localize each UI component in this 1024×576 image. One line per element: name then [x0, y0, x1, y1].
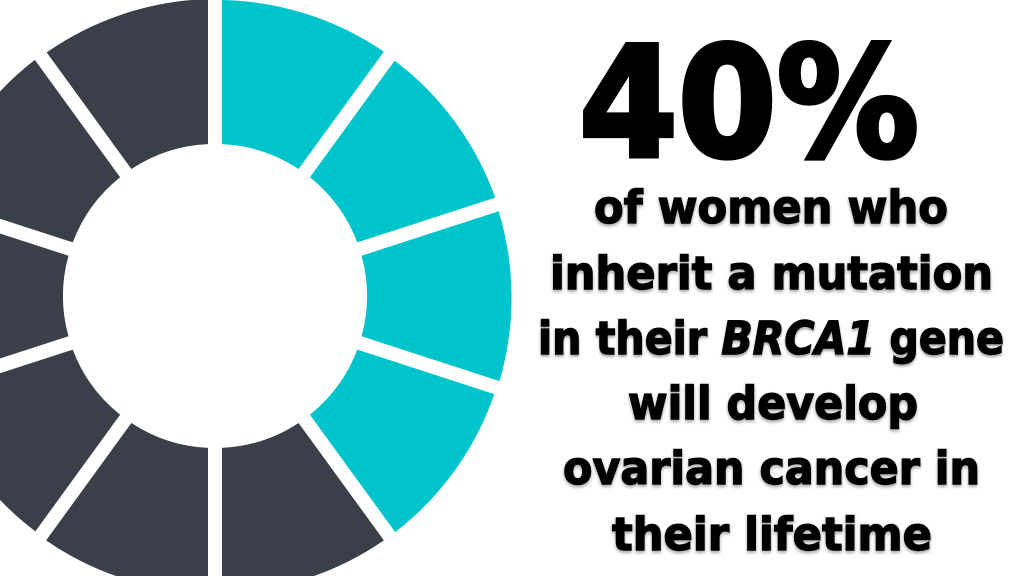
segment 4 teal — [284, 342, 494, 548]
segment 7 dark — [0, 299, 135, 531]
segment 8 dark — [0, 175, 92, 381]
segment 6 dark — [46, 423, 208, 576]
headline: 40%: 40% — [579, 15, 919, 193]
segment 5 dark — [222, 423, 384, 576]
segment 3 teal — [338, 211, 549, 417]
line 1: of women who — [594, 181, 948, 234]
line 2: inherit a mutation — [550, 247, 993, 300]
line 3: in their BRCA1 gene — [538, 312, 1004, 365]
donut chart: 4 of 10 segments highlighted — [0, 0, 549, 576]
line 5: ovarian cancer in — [563, 442, 980, 495]
segment 9 dark — [0, 44, 146, 250]
segment 2 teal — [295, 61, 526, 293]
segment 1 teal — [222, 0, 384, 169]
description text — [538, 181, 1004, 561]
segment 10 dark — [47, 0, 277, 189]
line 6: their lifetime — [612, 508, 932, 561]
line 4: will develop — [628, 377, 918, 430]
